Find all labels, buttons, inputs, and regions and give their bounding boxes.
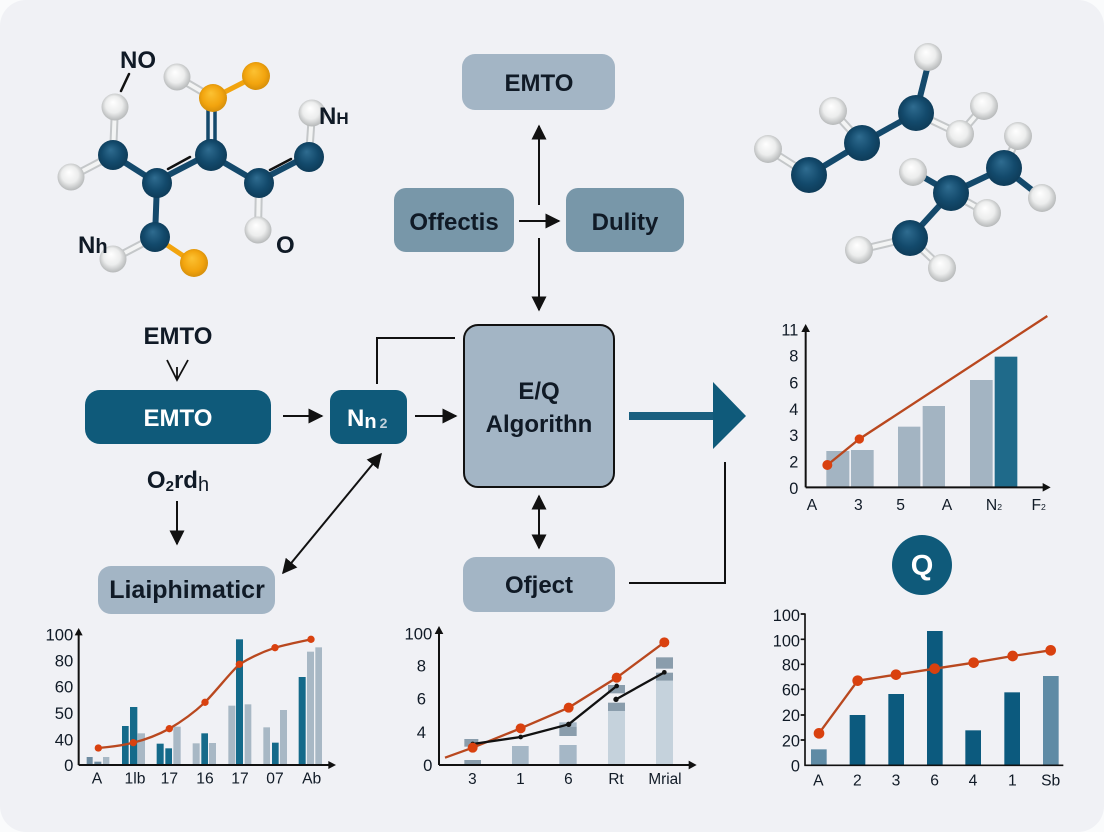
chart: bottom right bars and line: 4 — [969, 773, 978, 790]
chart: bottom right bars and line: 80 — [782, 657, 800, 675]
label: O2rdh: rd — [174, 467, 198, 494]
chart: top right bars and line: 3 — [789, 427, 798, 445]
arrow: up to EMTO — [538, 126, 540, 205]
chart: bottom right bars and line: 6 — [930, 773, 939, 790]
arrow: algorithm to object — [538, 496, 540, 548]
connector: Nn2 up to algorithm — [377, 338, 455, 384]
chart: bottom left grouped bars and line: 1lb — [125, 770, 146, 787]
chart: bottom left grouped bars and line: 100 — [46, 625, 73, 644]
chart: bottom left grouped bars and line: 40 — [55, 730, 73, 749]
chart: top right bars and line: 2 — [789, 453, 798, 471]
box: central algorithm: E/Q — [518, 378, 560, 405]
molecule: left labelled structure: Nh — [78, 232, 108, 259]
box: Dulity: Dulity — [592, 209, 659, 236]
arrow: EMTO label down — [167, 360, 188, 380]
chart: bottom right bars and line: 3 — [892, 773, 901, 790]
chart: top right bars and line: A — [942, 497, 953, 514]
chart: bottom left grouped bars and line: Ab — [302, 770, 322, 787]
arrow: Nn2 to algorithm — [415, 415, 456, 417]
box: Dulity — [566, 188, 684, 252]
chart: top right bars and line: 5 — [896, 497, 905, 514]
molecule: left labelled structure: NH — [319, 103, 349, 130]
box: Object: Ofject — [505, 572, 573, 599]
label: EMTO: EMTO — [144, 323, 212, 350]
chart: bottom centre stacked bars and lines: 8 — [417, 657, 426, 676]
connector: object to output — [629, 462, 725, 583]
chart: top right bars and line: F2 — [1031, 497, 1046, 514]
chart: bottom left grouped bars and line: 60 — [55, 677, 73, 696]
chart: bottom centre stacked bars and lines: Mrial — [648, 771, 682, 788]
label: O2rdh: O — [147, 467, 166, 494]
box: Liaiphimaticr — [98, 566, 275, 614]
box: Object — [463, 557, 615, 612]
box: central algorithm: Algorithn — [486, 411, 592, 438]
icon: Q circle — [892, 535, 952, 595]
box: Nn2: n — [364, 411, 377, 433]
chart: top right bars and line: 11 — [781, 322, 798, 340]
molecule: left labelled structure: NO — [120, 47, 156, 74]
label: O2rdh: h — [198, 474, 209, 496]
chart: bottom left grouped bars and line: 0 — [64, 756, 73, 775]
arrow: Offectis to Dulity — [519, 220, 559, 222]
chart: bottom right bars and line: A — [813, 773, 824, 790]
box: Nn2 — [330, 390, 407, 444]
molecule: left labelled structure — [58, 47, 349, 277]
chart: bottom right bars and line: 0 — [791, 757, 800, 775]
chart: bottom right bars and line: 20 — [782, 707, 800, 725]
chart: bottom left grouped bars and line: 16 — [196, 770, 214, 787]
chart: bottom centre stacked bars and lines: Rt — [608, 771, 624, 788]
chart: bottom centre stacked bars and lines — [405, 625, 697, 788]
chart: bottom right bars and line: 100 — [773, 607, 800, 625]
chart: bottom left grouped bars and line: 07 — [266, 770, 284, 787]
box: Liaiphimaticr: Liaiphimaticr — [109, 576, 265, 604]
chart: bottom centre stacked bars and lines: 3 — [468, 771, 477, 788]
arrow: EMTO to Nn2 — [283, 415, 322, 417]
icon: Q circle: Q — [911, 550, 933, 582]
chart: bottom right bars and line: 100 — [773, 632, 800, 650]
chart: bottom centre stacked bars and lines: 6 — [417, 690, 426, 709]
chart: bottom right bars and line — [773, 607, 1063, 790]
molecule: left labelled structure: O — [276, 232, 295, 259]
box: EMTO main: EMTO — [144, 405, 212, 432]
box: Nn2: 2 — [380, 415, 388, 431]
chart: bottom left grouped bars and line: A — [92, 770, 103, 787]
arrow: big output arrow — [629, 382, 746, 449]
chart: top right bars and line: 8 — [789, 348, 798, 366]
chart: bottom centre stacked bars and lines: 4 — [417, 723, 426, 742]
arrow: down to algorithm — [538, 238, 540, 310]
chart: bottom right bars and line: Sb — [1041, 773, 1061, 790]
chart: bottom right bars and line: 2 — [853, 773, 862, 790]
label: O2rdh: 2 — [166, 478, 174, 495]
chart: bottom right bars and line: 60 — [782, 682, 800, 700]
box: Nn2: N — [347, 405, 364, 432]
chart: bottom centre stacked bars and lines: 1 — [516, 771, 525, 788]
chart: bottom left grouped bars and line: 17 — [161, 770, 178, 787]
chart: bottom left grouped bars and line — [46, 625, 336, 787]
chart: top right bars and line: 6 — [789, 374, 798, 392]
box: Offectis: Offectis — [409, 209, 499, 236]
box: EMTO top: EMTO — [505, 70, 573, 97]
chart: bottom centre stacked bars and lines: 6 — [564, 771, 573, 788]
chart: bottom centre stacked bars and lines: 100 — [405, 625, 432, 644]
box: Offectis — [394, 188, 514, 252]
chart: bottom left grouped bars and line: 80 — [55, 651, 73, 670]
box: central algorithm — [464, 325, 614, 487]
arrow: O2rdh down — [176, 501, 178, 544]
chart: bottom centre stacked bars and lines: 0 — [423, 756, 432, 775]
chart: bottom right bars and line: 20 — [782, 732, 800, 750]
box: EMTO top — [462, 54, 615, 110]
arrow: diagonal double arrow — [283, 454, 381, 573]
chart: top right bars and line: A — [807, 497, 818, 514]
chart: top right bars and line: N2 — [986, 497, 1002, 514]
chart: top right bars and line: 4 — [789, 401, 798, 419]
molecule: right ball and stick — [754, 43, 1056, 282]
chart: bottom right bars and line: 1 — [1008, 773, 1017, 790]
chart: top right bars and line: 0 — [789, 480, 798, 498]
chart: bottom left grouped bars and line: 17 — [231, 770, 249, 787]
chart: top right bars and line — [781, 316, 1051, 514]
box: EMTO main — [85, 390, 271, 444]
chart: bottom left grouped bars and line: 50 — [55, 704, 73, 723]
chart: top right bars and line: 3 — [854, 497, 863, 514]
